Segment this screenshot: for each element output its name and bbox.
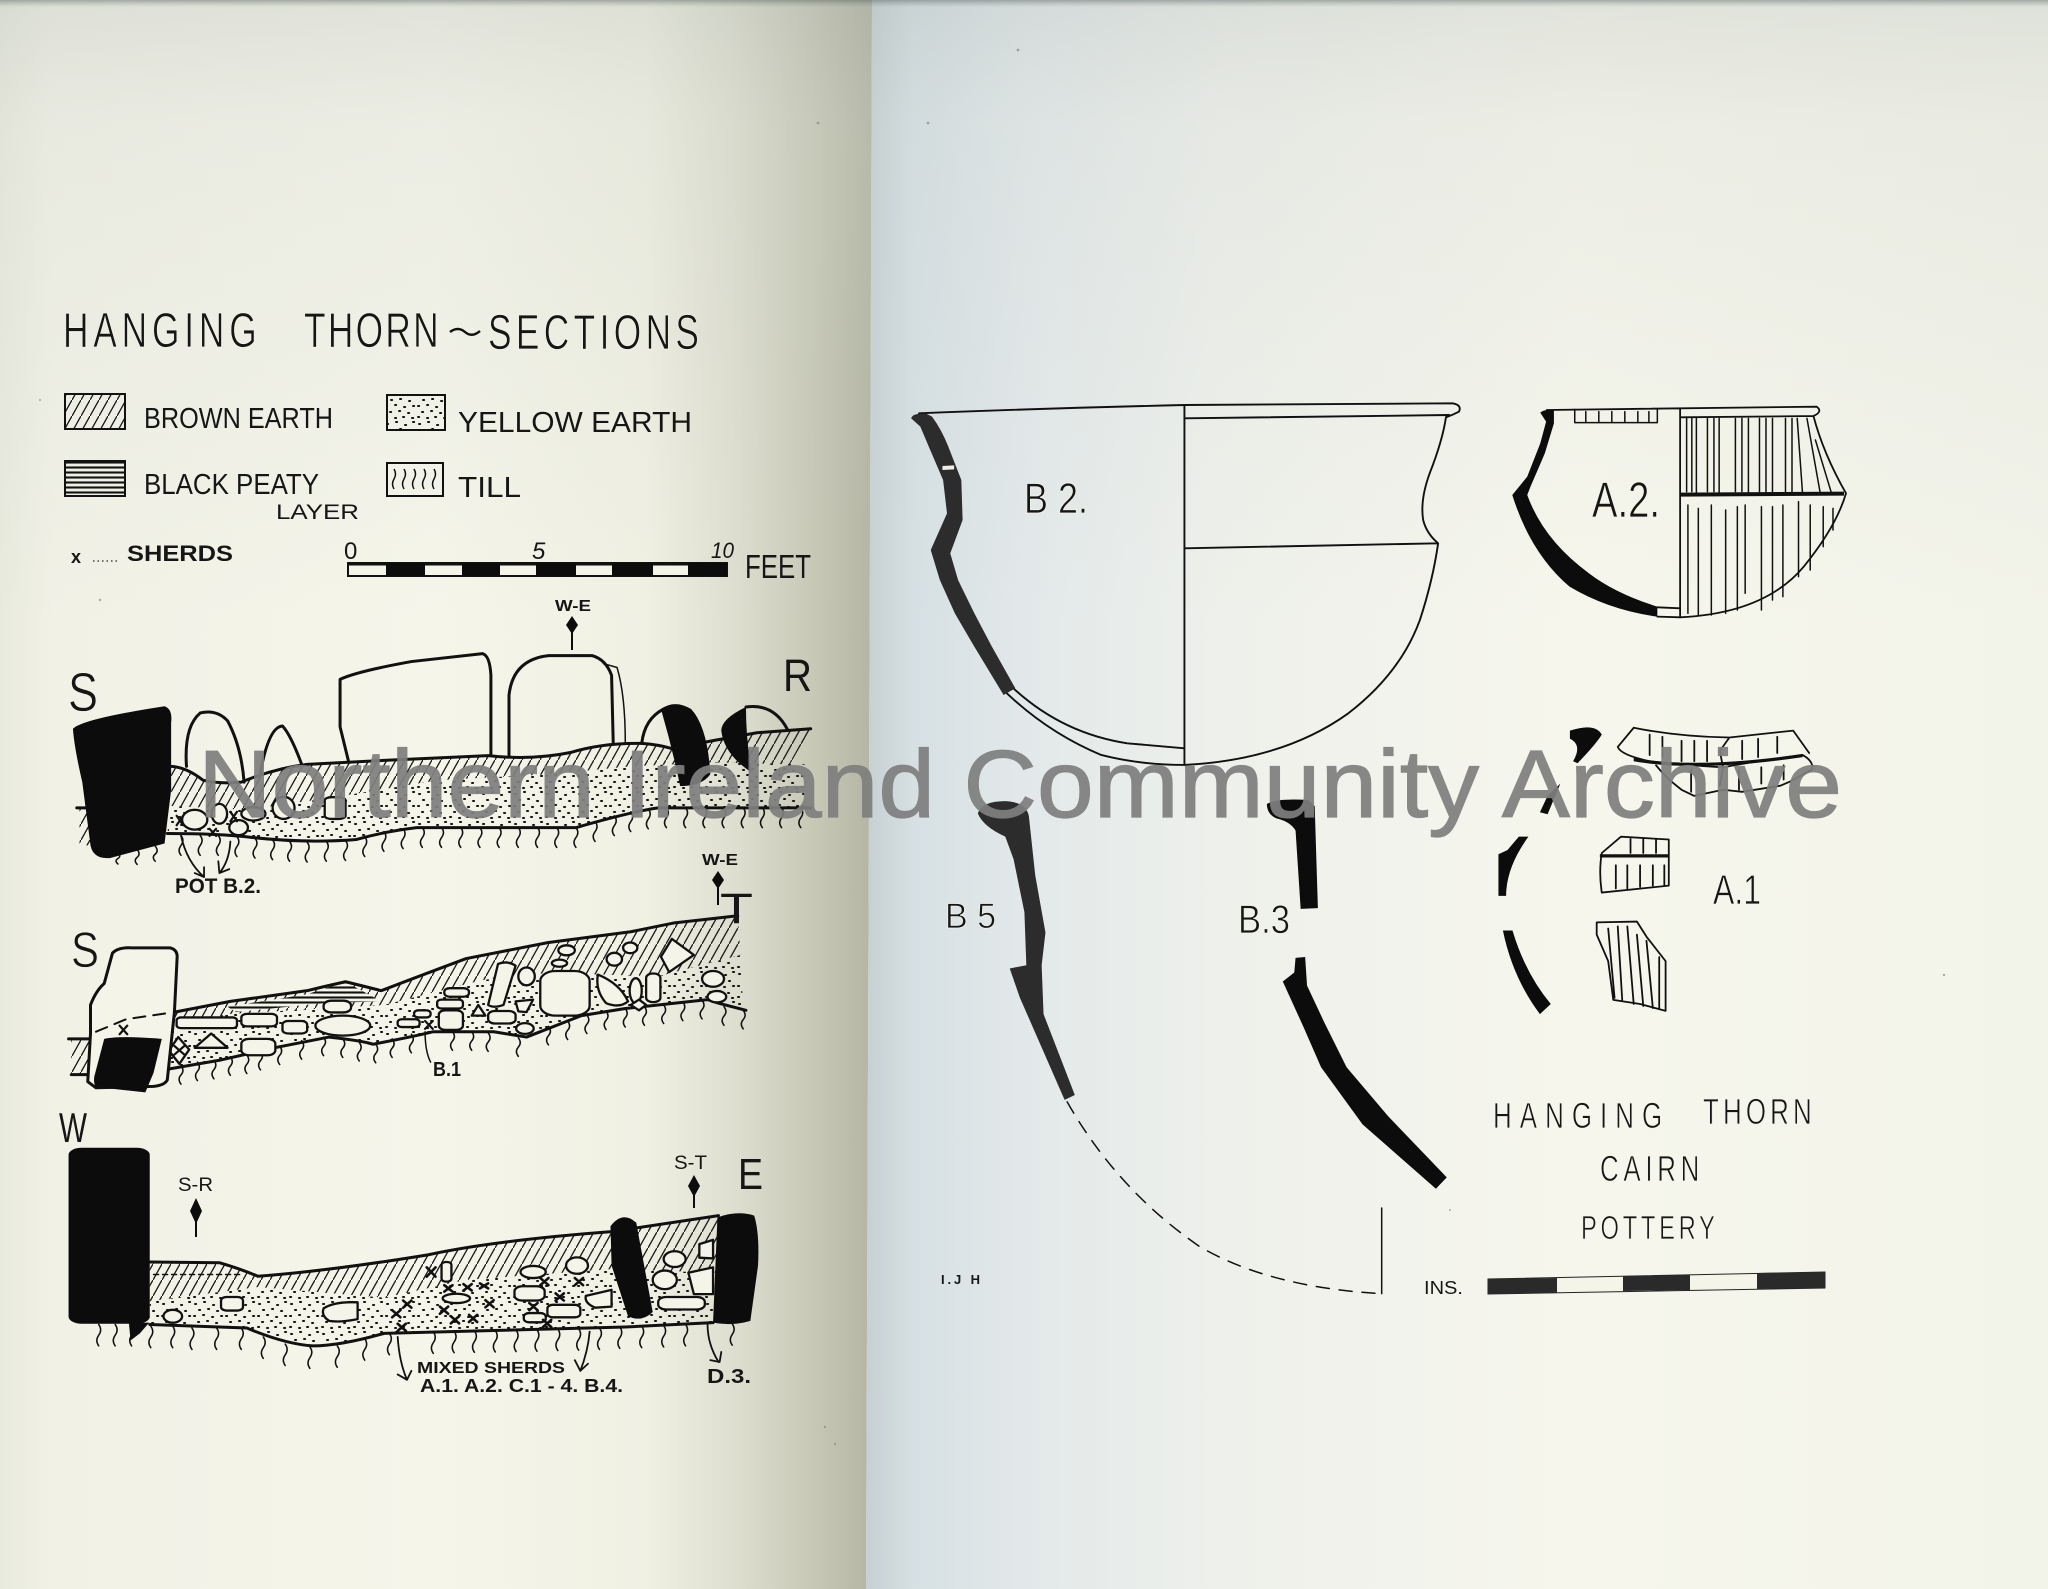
scale bar: feet: 10 bbox=[711, 538, 735, 563]
scale bar: feet: FEET bbox=[745, 548, 811, 585]
legend: sherds key: x bbox=[71, 547, 81, 567]
brown earth layer bbox=[174, 916, 740, 1023]
legend label: black peaty layer bbox=[144, 469, 359, 524]
brown earth layer bbox=[171, 729, 811, 810]
pot profile B5 bbox=[945, 801, 1382, 1294]
panel: left page, sections bbox=[59, 303, 812, 1396]
sunken stones bbox=[182, 810, 207, 830]
section chart: S to T bbox=[69, 852, 753, 1092]
section marker: W-E bbox=[702, 852, 738, 905]
B3 lower wall bbox=[1283, 957, 1447, 1189]
B3 label: B.3 bbox=[1238, 898, 1290, 942]
stones in rubble bbox=[177, 1017, 237, 1028]
pottery heading: POTTERY bbox=[1581, 1210, 1715, 1247]
A1 sherd lower bbox=[1597, 922, 1666, 1011]
black stones bbox=[69, 1148, 150, 1324]
brown earth layer bbox=[150, 1216, 719, 1301]
scale bar: feet bbox=[344, 538, 811, 585]
arrows to pot bbox=[181, 836, 230, 877]
title: SECTIONS bbox=[488, 305, 699, 360]
scale bar: inches bbox=[1424, 1272, 1825, 1298]
pot A2 bbox=[1512, 407, 1846, 617]
B5 wall bbox=[978, 801, 1075, 1100]
legend swatch: yellow earth bbox=[387, 395, 445, 430]
pot A2 section wall bbox=[1512, 410, 1657, 617]
pottery heading: THORN bbox=[1703, 1092, 1812, 1132]
till squiggles bbox=[97, 1324, 734, 1368]
A1 sherd top bbox=[1618, 728, 1812, 796]
sherd marks bbox=[392, 1267, 583, 1331]
B5 reconstructed curve bbox=[1067, 1102, 1382, 1294]
label: mixed sherds: A.1. A.2. C.1 - 4. B.4. bbox=[420, 1376, 623, 1396]
yellow earth layer bbox=[167, 762, 806, 841]
till squiggles bbox=[116, 808, 803, 864]
label: B.1: B.1 bbox=[433, 1059, 461, 1081]
pottery heading bbox=[1493, 1092, 1812, 1247]
section marker: W-E bbox=[555, 598, 591, 650]
A1 sherd middle bbox=[1600, 837, 1669, 893]
section marker: S-T: S-T bbox=[674, 1153, 707, 1174]
pot label: B 2. bbox=[1024, 475, 1088, 523]
legend label: brown earth: BROWN EARTH bbox=[144, 403, 333, 435]
peaty layer bbox=[228, 982, 381, 1012]
pottery heading: CAIRN bbox=[1600, 1149, 1699, 1189]
section drawing S-R bbox=[73, 654, 811, 877]
legend swatch: brown earth bbox=[65, 394, 125, 429]
section drawing S-T bbox=[69, 916, 746, 1092]
legend label: black peaty layer: BLACK PEATY bbox=[144, 469, 319, 501]
sherd marks bbox=[177, 812, 237, 836]
leader line to B.1 bbox=[425, 1032, 431, 1062]
pot A2 ribbing bbox=[1687, 418, 1833, 615]
title: HANGING bbox=[63, 303, 257, 358]
ground lines bbox=[150, 1216, 719, 1346]
legend: sherds key bbox=[71, 541, 233, 567]
title: THORN bbox=[304, 303, 439, 358]
drawing initials: I.J H bbox=[941, 1272, 980, 1287]
section label: T: T bbox=[720, 885, 753, 933]
section label: W: W bbox=[59, 1104, 87, 1151]
old ground surface dashed bbox=[96, 1013, 170, 1032]
scale bar: inches: INS. bbox=[1424, 1278, 1463, 1298]
label: mixed sherds: MIXED SHERDS bbox=[417, 1360, 565, 1377]
legend label: yellow earth: YELLOW EARTH bbox=[458, 407, 692, 439]
sherd marks bbox=[120, 1021, 433, 1055]
till squiggles bbox=[179, 1000, 745, 1084]
legend bbox=[65, 394, 692, 567]
A1 wall profiles bbox=[1498, 784, 1560, 1014]
yellow earth layer bbox=[150, 1269, 713, 1346]
stones in rubble bbox=[163, 1310, 182, 1323]
section label: S: S bbox=[68, 661, 98, 723]
black buried stone bbox=[94, 1037, 162, 1092]
legend label: black peaty layer: LAYER bbox=[276, 501, 359, 524]
B3 upper wall bbox=[1267, 799, 1318, 909]
scale bar: feet: 0 bbox=[344, 538, 357, 565]
panel: right page, pottery bbox=[911, 403, 1846, 1298]
pottery heading: HANGING bbox=[1493, 1096, 1662, 1136]
legend swatch: black peaty layer bbox=[65, 461, 125, 496]
section chart: W to E bbox=[59, 1104, 763, 1396]
diamond with sherd bbox=[169, 1037, 189, 1064]
section drawing W-E bbox=[69, 1148, 758, 1380]
arrows to labels bbox=[398, 1324, 721, 1380]
standing stone bbox=[88, 948, 177, 1088]
B5 label: B 5 bbox=[945, 897, 996, 936]
section label: S: S bbox=[71, 922, 99, 978]
ground lines bbox=[77, 729, 811, 841]
yellow earth layer bbox=[167, 955, 743, 1069]
legend swatch: till bbox=[387, 463, 443, 496]
pot B2 outline bbox=[919, 403, 1460, 765]
pot A2 outline bbox=[1547, 407, 1846, 617]
section marker: W-E: W-E bbox=[555, 598, 591, 615]
section marker: S-R bbox=[178, 1175, 213, 1237]
watermark: Northern Ireland Community Archive bbox=[198, 731, 1842, 838]
A1 rim profile bbox=[1570, 727, 1602, 763]
standing stones bbox=[186, 654, 787, 782]
section label: E: E bbox=[738, 1150, 763, 1199]
A1 label: A.1 bbox=[1713, 866, 1761, 913]
background: scanned left page bbox=[0, 0, 872, 1589]
legend: sherds key: SHERDS bbox=[127, 541, 233, 566]
label: D.3: D.3. bbox=[707, 1366, 751, 1388]
section marker: S-R: S-R bbox=[178, 1175, 213, 1196]
background: scanned right page bbox=[866, 0, 2048, 1589]
black stones bbox=[73, 706, 171, 858]
section marker: S-T bbox=[674, 1153, 707, 1208]
pot fragments A1 bbox=[1498, 727, 1812, 1014]
section marker: W-E: W-E bbox=[702, 852, 738, 869]
legend label: till: TILL bbox=[458, 472, 521, 504]
label: pot B.2: POT B.2. bbox=[175, 875, 261, 898]
label: mixed sherds bbox=[417, 1360, 623, 1396]
pot profile B3 bbox=[1238, 799, 1447, 1189]
section chart: S to R bbox=[68, 598, 812, 898]
pot B2 section wall bbox=[911, 414, 1015, 695]
pot A2 rim band bbox=[1575, 409, 1657, 423]
ground lines bbox=[69, 916, 746, 1075]
section label: R: R bbox=[783, 650, 812, 701]
pot label: A.2. bbox=[1592, 472, 1660, 528]
title bbox=[63, 303, 699, 360]
scale bar: feet: 5 bbox=[532, 538, 546, 565]
pot B2 bbox=[911, 403, 1460, 765]
